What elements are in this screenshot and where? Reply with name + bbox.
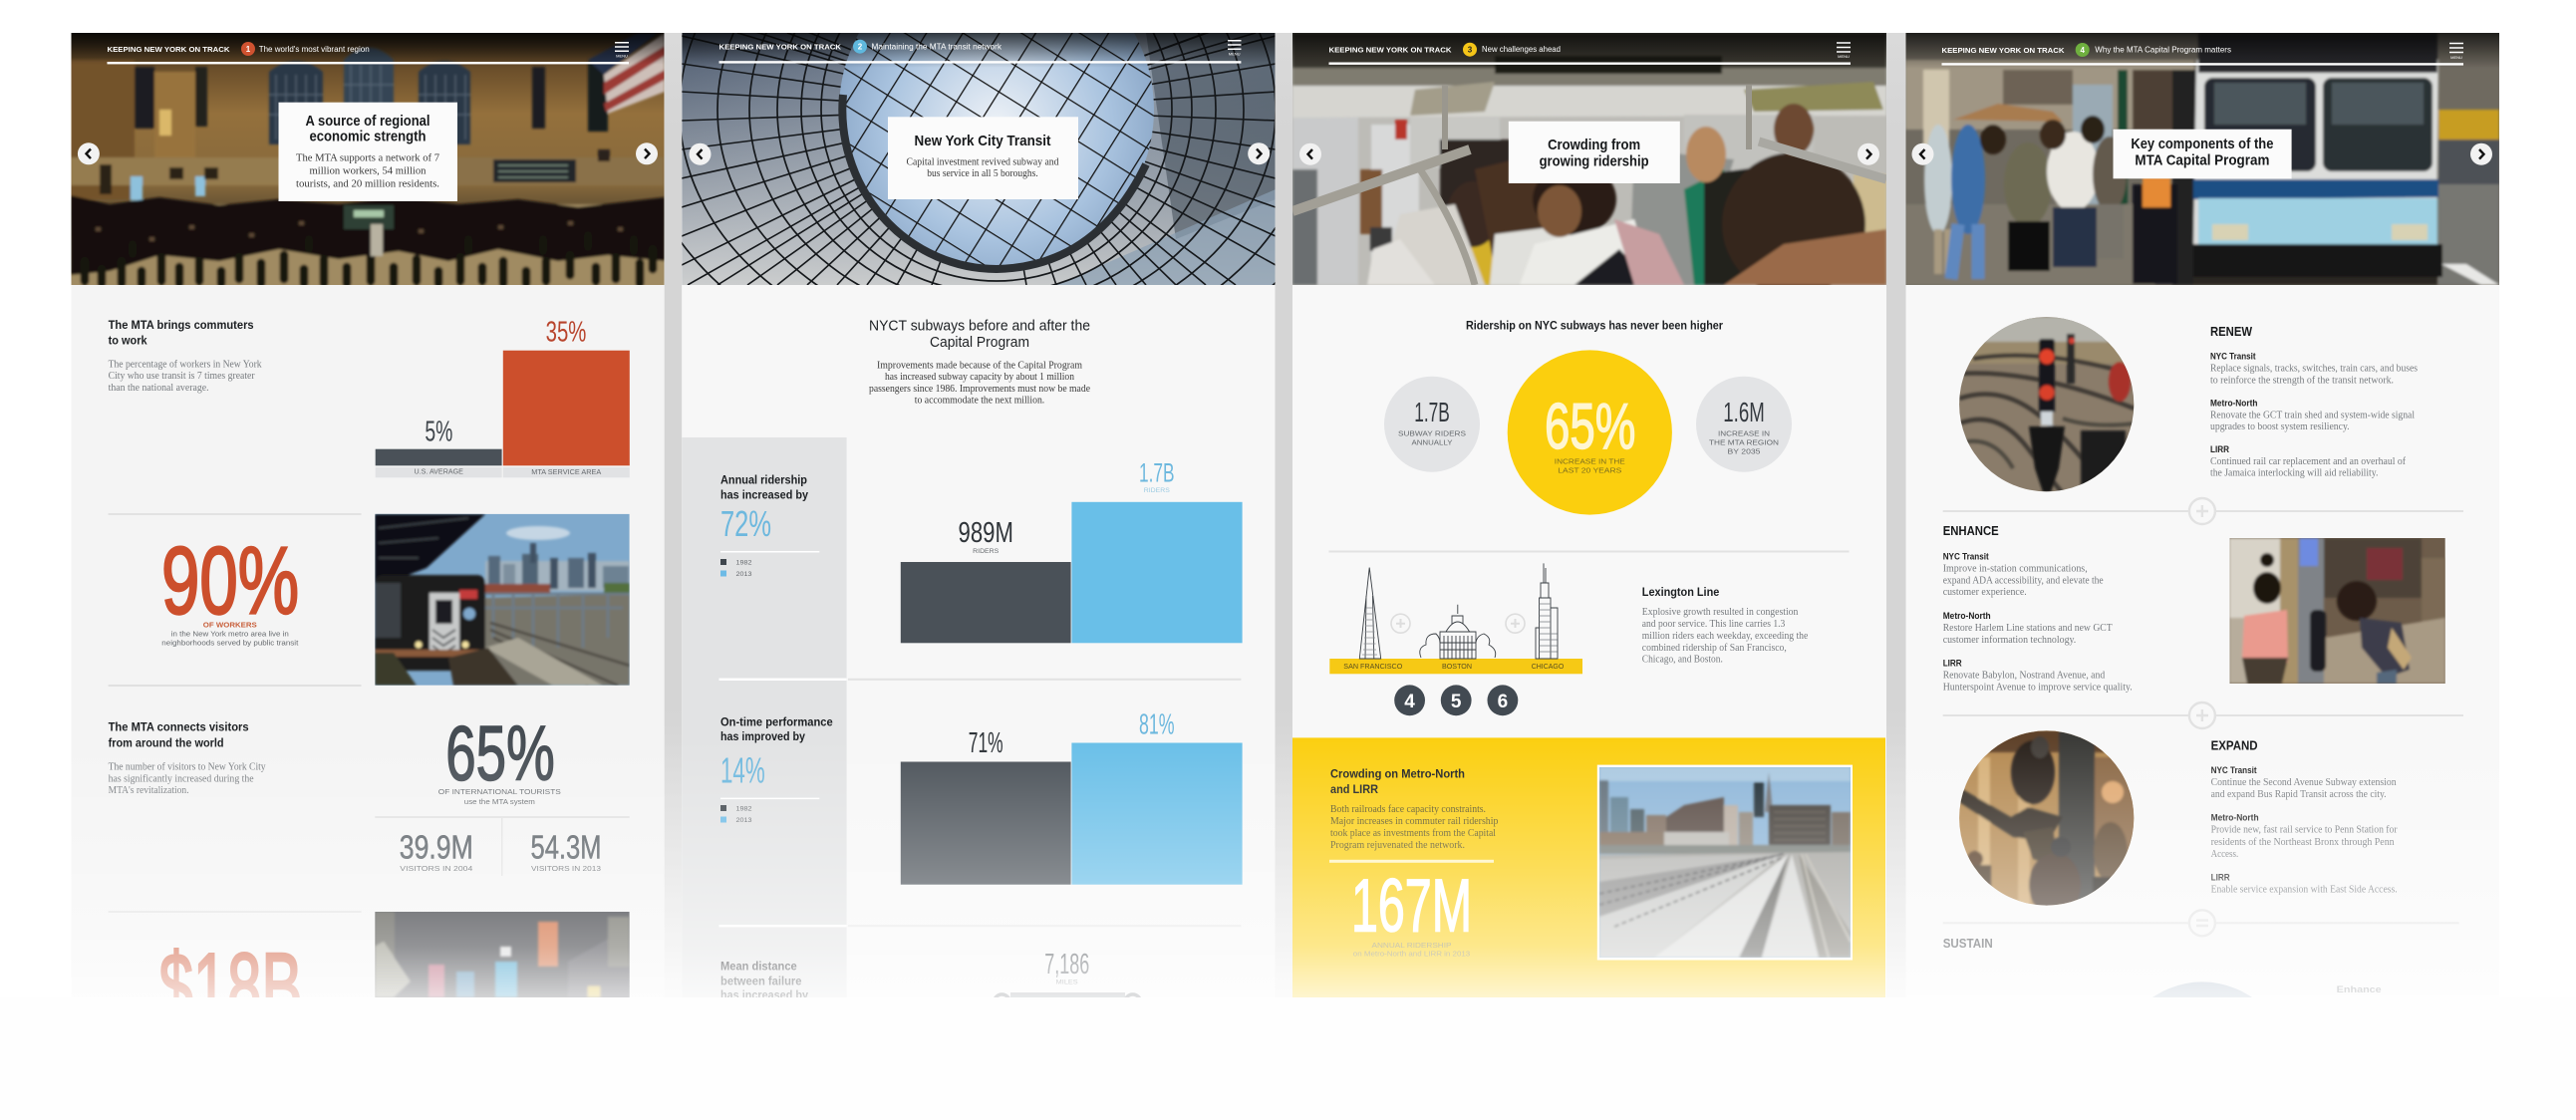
photo: help point station [2229, 538, 2445, 684]
header: section 2: KEEPING NEW YORK ON TRACK [719, 43, 842, 52]
title card: regional economic strength: economic strength [309, 129, 427, 145]
header: section 3: MENU [1838, 54, 1850, 59]
text block: capital program improvements: has increased subway capacity by about 1 million [885, 372, 1075, 383]
text block: renew: to reinforce the strength of the transit network. [2210, 375, 2394, 386]
stat block: annual ridership [720, 475, 819, 578]
text block: enhance: Hunterspoint Avenue to improve service quality. [1943, 682, 2133, 694]
stat: 90 percent: 90% [161, 527, 299, 634]
stat block: annual ridership: 72% [720, 503, 771, 544]
bar chart: annual ridership: RIDERS [1144, 488, 1170, 494]
heading: before and after [869, 317, 1090, 351]
illustration: skyline comparison [1329, 563, 1582, 674]
chart: mean distance dumbbell [994, 949, 1141, 1010]
heading: before and after: NYCT subways before and after the [869, 317, 1090, 334]
bar chart: transit commuters: 35% [546, 316, 586, 348]
icons: subway line bullets: 4 [1404, 692, 1415, 712]
photo: construction workers [1959, 730, 2135, 917]
text block: capital program improvements [869, 360, 1090, 407]
title card: key components: MTA Capital Program [2135, 152, 2269, 169]
header: section 4 [1941, 43, 2463, 66]
stat block: on-time performance: 14% [720, 749, 765, 791]
bar chart: on-time performance: 71% [969, 727, 1003, 759]
stat circle: 65 percent: INCREASE IN THE [1555, 459, 1625, 466]
panel: Metro-North and LIRR crowding: Program rejuvenated the network. [1330, 840, 1465, 851]
photo: Grand Central Terminal [71, 33, 665, 285]
photo: subway train [375, 514, 630, 686]
stat block: annual ridership: 2013 [735, 572, 752, 578]
text block: expand: Continue the Second Avenue Subway extension [2211, 777, 2397, 788]
stat: 65 percent tourists: OF INTERNATIONAL TOURISTS [438, 789, 561, 796]
stat block: annual ridership: Annual ridership [720, 475, 807, 487]
text block: expand: Access. [2211, 849, 2238, 860]
panel: Metro-North and LIRR crowding: and LIRR [1330, 784, 1379, 796]
section heading: commuters: to work [109, 335, 147, 347]
panel: Metro-North and LIRR crowding [1292, 737, 1885, 997]
text block: renew: NYC Transit [2210, 352, 2256, 362]
chart: mean distance dumbbell: MILES [1056, 980, 1078, 985]
arrow: previous [1299, 143, 1321, 165]
arrow: previous [690, 143, 712, 165]
icon: plus [1391, 614, 1410, 633]
section heading: commuters [109, 320, 254, 347]
stat block: on-time performance: 2013 [735, 818, 752, 824]
bar chart: on-time performance: 81% [1139, 709, 1175, 741]
text block: capital program improvements: Improvements made because of the Capital Program [877, 360, 1082, 371]
bar chart: transit commuters [376, 316, 630, 477]
heading: before and after: Capital Program [930, 334, 1029, 351]
gaps between panels [665, 33, 1905, 997]
panel: economic strength [71, 33, 665, 1040]
stat: 18 billion: $18B [159, 934, 303, 1040]
stat: visitors 2004 [400, 829, 473, 873]
bottom page area [0, 997, 2576, 1120]
stat circle: region increase: BY 2035 [1728, 449, 1761, 456]
stat block: mean distance between failure: Mean distance [720, 961, 797, 973]
stat block: on-time performance: 1982 [735, 807, 752, 813]
stat: 90 percent [161, 527, 299, 648]
panel: Metro-North and LIRR crowding: Both railroads face capacity constraints. [1330, 804, 1486, 815]
stat block: on-time performance [720, 717, 833, 824]
text block: enhance: Restore Harlem Line stations and new GCT [1943, 623, 2113, 634]
text block: renew: Renovate the GCT train shed and system-wide signal [2210, 410, 2415, 420]
text block: enhance: Improve in-station communications, [1943, 563, 2088, 574]
stat: visitors 2004: 39.9M [400, 829, 473, 866]
stat circle: region increase: THE MTA REGION [1709, 440, 1779, 447]
text block: visitors: has significantly increased during the [109, 773, 254, 784]
title card: regional economic strength [279, 103, 457, 201]
title card: key components: Key components of the [2131, 136, 2273, 152]
text block: Lexington Line: combined ridership of San Francisco, [1642, 643, 1787, 654]
stat circle: 65 percent: LAST 20 YEARS [1558, 468, 1622, 475]
header: section 4: KEEPING NEW YORK ON TRACK [1941, 46, 2065, 55]
bar chart: annual ridership: RIDERS [973, 549, 999, 555]
stat block: mean distance between failure: between failure [720, 976, 801, 987]
section heading: visitors: from around the world [109, 737, 224, 749]
icon: plus connector [2189, 702, 2215, 728]
stat circle: region increase [1696, 377, 1792, 472]
text block: renew: LIRR [2210, 444, 2229, 454]
section heading: commuters: The MTA brings commuters [109, 320, 254, 332]
text block: expand: LIRR [2211, 872, 2230, 882]
header: section 3 [1329, 43, 1851, 65]
sidebar background [682, 437, 847, 997]
text block: capital program improvements: passengers since 1986. Improvements must now be made [869, 384, 1090, 395]
text block: renew: Replace signals, tracks, switches, train cars, and buses [2210, 364, 2418, 375]
icons: subway line bullets [1394, 685, 1518, 715]
header: section 1: 1 [246, 45, 251, 54]
text block: enhance: expand ADA accessibility, and elevate the [1943, 575, 2104, 586]
title card: New York City Transit [888, 117, 1078, 199]
text block: commuters [109, 359, 262, 394]
panel: transit network [682, 33, 1276, 997]
photo: Fulton Center skylight [682, 33, 1276, 285]
header: section 2: 2 [858, 43, 863, 52]
header: section 3: New challenges ahead [1482, 45, 1561, 54]
illustration: skyline comparison: CHICAGO [1532, 664, 1565, 671]
stat circle: subway riders [1384, 377, 1480, 472]
stat block: on-time performance: has improved by [720, 731, 806, 743]
text block: enhance: Renovate Babylon, Nostrand Avenue, and [1943, 670, 2105, 681]
stat circle: region increase: INCREASE IN [1718, 430, 1770, 437]
stat: visitors 2013: 54.3M [530, 829, 602, 866]
icon: Chicago tower [1536, 563, 1558, 659]
title card: New York City Transit: New York City Transit [915, 133, 1051, 149]
panel: Metro-North and LIRR crowding: Crowding on Metro-North [1330, 768, 1465, 780]
text block: expand: Enable service expansion with East Side Access. [2211, 884, 2398, 895]
arrow: next [1858, 143, 1879, 165]
bar chart: annual ridership [901, 457, 1243, 643]
title card: key components [2113, 130, 2292, 178]
arrow: next [1248, 142, 1270, 164]
bar chart: transit commuters: U.S. AVERAGE [415, 468, 463, 476]
stat block: mean distance between failure: has increased by [720, 990, 809, 1002]
stat: 90 percent: neighborhoods served by public transit [161, 641, 298, 648]
text block: Lexington Line: and poor service. This line carries 1.3 [1642, 619, 1785, 630]
text block: enhance: NYC Transit [1943, 551, 1989, 561]
stat block: mean distance between failure [720, 961, 809, 1002]
bar chart: transit commuters: MTA SERVICE AREA [531, 469, 602, 476]
header: section 4: MENU [2450, 55, 2462, 60]
photo: select bus service [1905, 33, 2499, 285]
text block: commuters: The percentage of workers in New York [109, 359, 262, 370]
stat: 65 percent tourists: 65% [445, 708, 555, 796]
arrow: next [2470, 143, 2492, 165]
header: section 1: KEEPING NEW YORK ON TRACK [108, 45, 230, 54]
section heading: visitors: The MTA connects visitors [109, 721, 249, 733]
panel: Metro-North and LIRR crowding: 167M [1351, 864, 1472, 948]
panel: Metro-North and LIRR crowding: Major increases in commuter rail ridership [1330, 816, 1498, 827]
header: section 2: Maintaining the MTA transit network [871, 43, 1002, 52]
text block: expand: Provide new, fast rail service to Penn Station for [2211, 825, 2398, 836]
photo: sustain circle [2115, 981, 2290, 1120]
bar chart: annual ridership: 1.7B [1139, 457, 1175, 487]
heading: sustain: SUSTAIN [1943, 937, 1993, 951]
title card: regional economic strength: tourists, and 20 million residents. [296, 178, 439, 189]
stat block: on-time performance: On-time performance [720, 717, 833, 729]
header: section 2 [719, 40, 1242, 64]
stat circle: subway riders: ANNUALLY [1411, 440, 1453, 447]
text block: renew: upgrades to boost system resiliency. [2210, 421, 2350, 432]
header: section 4: Why the MTA Capital Program matters [2095, 46, 2231, 55]
stat block: annual ridership: has increased by [720, 489, 809, 501]
stat: 90 percent: in the New York metro area live in [171, 631, 289, 638]
text block: Lexington Line: Lexington Line [1642, 587, 1719, 599]
title card: New York City Transit: bus service in all 5 boroughs. [927, 168, 1038, 179]
bar chart: annual ridership: 989M [959, 517, 1013, 549]
photo: Times Square [375, 912, 630, 997]
illustration: skyline comparison: BOSTON [1442, 664, 1472, 671]
text block: enhance: customer information technology. [1943, 635, 2076, 646]
text block: Lexington Line: Chicago, and Boston. [1642, 655, 1723, 666]
header: section 1 [108, 42, 629, 64]
header: section 1: MENU [616, 54, 628, 58]
text block: renew: RENEW [2210, 325, 2252, 339]
title card: regional economic strength: The MTA supports a network of 7 [296, 153, 439, 164]
stat: visitors 2004: VISITORS IN 2004 [400, 866, 472, 873]
text block: expand: EXPAND [2211, 738, 2258, 752]
title card: crowding: growing ridership [1540, 153, 1649, 170]
heading: ridership: Ridership on NYC subways has never been higher [1466, 321, 1723, 333]
bar chart: on-time performance [901, 709, 1243, 885]
icons: subway line bullets: 6 [1498, 692, 1508, 712]
panel: new challenges [1292, 33, 1886, 997]
panel: Metro-North and LIRR crowding: ANNUAL RIDERSHIP [1371, 943, 1452, 950]
text block: expand: residents of the Northeast Bronx through Penn [2211, 837, 2395, 848]
title card: crowding [1509, 122, 1680, 183]
text block: capital program improvements: to accommodate the next million. [915, 396, 1044, 407]
header: section 4: 4 [2080, 46, 2085, 55]
text block: Lexington Line [1642, 587, 1809, 666]
stat circle: 65 percent [1508, 350, 1672, 515]
stat: 90 percent: OF WORKERS [203, 620, 257, 630]
text block: expand: and expand Bus Rapid Transit across the city. [2211, 789, 2387, 800]
photo: rail yard [1597, 765, 1853, 961]
text block: visitors: MTA's revitalization. [109, 785, 189, 796]
photo: signal and tracks [1959, 317, 2135, 493]
stat: visitors 2013: VISITORS IN 2013 [531, 866, 601, 873]
text block: enhance [1943, 524, 2133, 694]
text block: enhance: customer experience. [1943, 587, 2027, 598]
icon: plus [1506, 614, 1525, 633]
arrow: next [636, 142, 658, 164]
photo: crowded subway car [1292, 33, 1886, 296]
stat circle: 65 percent: 65% [1545, 390, 1635, 462]
text block: expand: Metro-North [2211, 813, 2259, 823]
stat: 65 percent tourists: use the MTA system [464, 799, 535, 806]
text block: Lexington Line: million riders each weekday, exceeding the [1642, 631, 1809, 642]
bar chart: transit commuters: 5% [425, 417, 452, 448]
text block: renew: Metro-North [2210, 398, 2257, 408]
icon: equals connector [2189, 910, 2215, 936]
arrow: previous [78, 142, 100, 164]
text block: renew: the Jamaica interlocking will aid reliability. [2210, 468, 2378, 479]
title card: crowding: Crowding from [1548, 137, 1640, 153]
text block: expand: NYC Transit [2211, 765, 2257, 775]
section heading: visitors [109, 721, 249, 749]
panel: capital program components [1905, 33, 2499, 997]
text block: enhance: LIRR [1943, 658, 1962, 668]
text block: Lexington Line: Explosive growth resulted in congestion [1642, 607, 1798, 618]
title card: regional economic strength: million workers, 54 million [309, 166, 427, 177]
icon: Boston building [1420, 605, 1496, 659]
title card: New York City Transit: Capital investment revived subway and [907, 156, 1059, 167]
text block: visitors [109, 761, 266, 796]
header: section 3: KEEPING NEW YORK ON TRACK [1329, 45, 1452, 54]
fade overlay [0, 737, 2576, 997]
title card: regional economic strength: A source of regional [305, 113, 430, 130]
header: section 3: 3 [1468, 46, 1473, 55]
icons: subway line bullets: 5 [1451, 692, 1462, 712]
stat circle: region increase: 1.6M [1723, 397, 1765, 427]
chart: mean distance dumbbell: 7,186 [1044, 949, 1089, 980]
stat circle: subway riders: SUBWAY RIDERS [1398, 430, 1466, 437]
stat: visitors 2013 [530, 829, 602, 873]
text block: renew: Continued rail car replacement and an overhaul of [2210, 456, 2407, 467]
label: enhance: Enhance [2337, 984, 2382, 994]
stat: 65 percent tourists [438, 708, 561, 806]
text block: commuters: than the national average. [109, 383, 209, 394]
text block: commuters: City who use transit is 7 times greater [109, 371, 255, 382]
header: section 2: MENU [1229, 52, 1241, 56]
header: section 1: The world's most vibrant region [259, 45, 370, 54]
panel: Metro-North and LIRR crowding: on Metro-North and LIRR in 2013 [1353, 952, 1470, 959]
text block: enhance: ENHANCE [1943, 524, 1999, 538]
panel: Metro-North and LIRR crowding: took place as investments from the Capital [1330, 828, 1496, 839]
text block: renew [2210, 325, 2418, 479]
icon: plus connector [2189, 498, 2215, 524]
text block: visitors: The number of visitors to New York City [109, 761, 266, 772]
arrow: previous [1911, 143, 1933, 165]
text block: expand [2211, 738, 2398, 895]
stat block: annual ridership: 1982 [735, 560, 752, 566]
icon: San Francisco tower [1359, 568, 1381, 659]
illustration: skyline comparison: SAN FRANCISCO [1343, 664, 1403, 671]
stat circle: subway riders: 1.7B [1414, 397, 1450, 427]
text block: enhance: Metro-North [1943, 611, 1991, 621]
